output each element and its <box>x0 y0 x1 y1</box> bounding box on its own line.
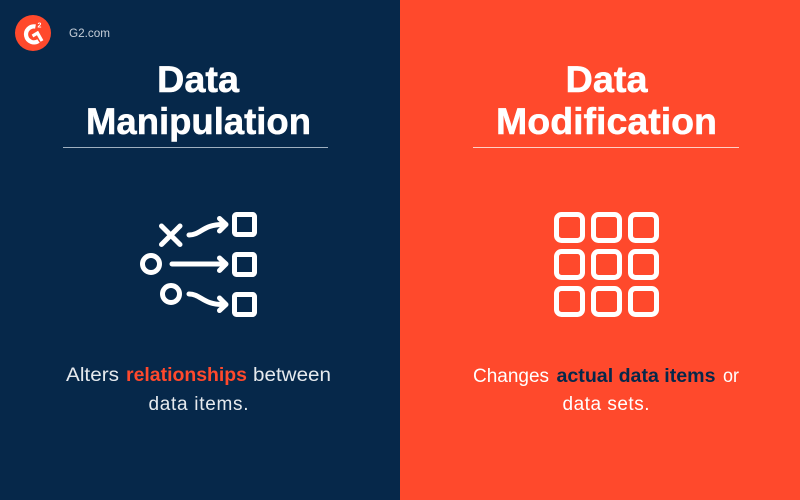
description: manipulation <box>66 365 331 415</box>
source label: G2.com <box>69 26 110 40</box>
description: modification: actual data items <box>556 366 716 387</box>
heading: data manipulation: Manipulation <box>86 101 311 142</box>
heading: data manipulation <box>86 59 311 142</box>
icon: relationship arrows <box>142 214 254 314</box>
description: manipulation: relationships <box>126 365 247 386</box>
panel: data manipulation <box>0 0 400 500</box>
heading: data modification: Data <box>566 59 648 100</box>
heading: data modification: Modification <box>496 101 717 142</box>
icon: G2 logo <box>15 15 51 51</box>
heading: data modification <box>496 59 717 142</box>
description: manipulation: data items. <box>148 394 248 415</box>
icon: data grid <box>556 214 656 314</box>
description: modification: Changes <box>473 366 549 387</box>
description: modification: or <box>723 366 740 387</box>
icon: G2 logo: 2 <box>38 22 42 30</box>
panel: data modification <box>400 0 800 500</box>
heading: data manipulation: Data <box>157 59 239 100</box>
description: modification <box>473 366 740 415</box>
description: manipulation: Alters <box>66 365 119 386</box>
description: manipulation: between <box>253 365 331 386</box>
description: modification: data sets. <box>562 394 650 415</box>
